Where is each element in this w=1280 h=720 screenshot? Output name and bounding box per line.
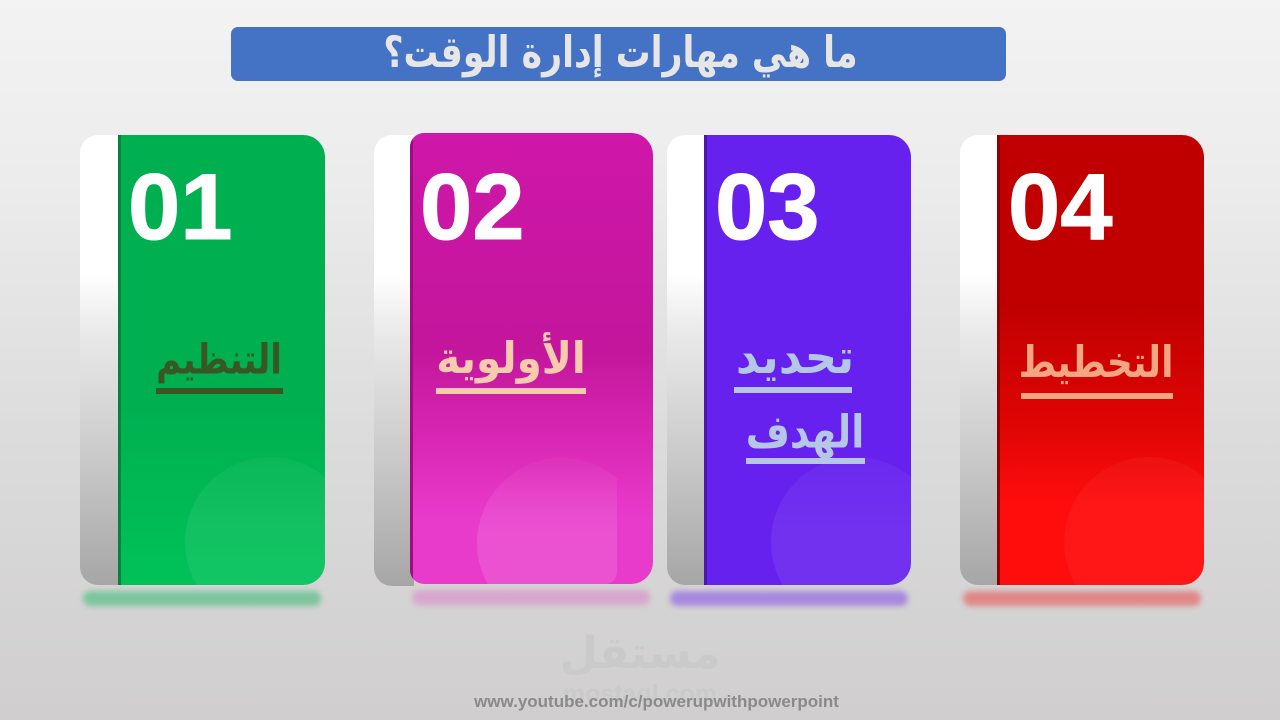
card body [118,135,325,585]
title banner [231,27,1006,81]
watermark: mostaql.com [563,680,717,708]
label: الأولوية [436,332,586,384]
label: التنظيم [156,336,282,384]
number: 02 [420,154,525,259]
label [734,329,865,464]
book spine [960,135,1000,585]
card body [410,133,653,584]
circle clipped [477,466,617,584]
panel: 01 organizing [80,135,325,610]
title text: ما هي مهارات إدارة الوقت؟ [383,28,858,78]
number: 01 [128,154,233,259]
label: التخطيط [1019,339,1173,388]
panel: 02 priority [374,133,653,608]
website URL: www.youtube.com/c/powerupwithpowerpoint [474,692,839,711]
panel: 04 planning [960,135,1204,610]
book spine [374,135,414,586]
card body [997,135,1204,585]
label: تحديد [736,329,854,384]
panel: 03 goal setting [667,135,911,610]
book spine [80,135,120,585]
watermark [560,628,720,708]
number: 03 [715,154,820,259]
reflection [963,591,1201,606]
reflection [412,590,650,605]
book spine [667,135,707,585]
reflection [83,591,321,606]
number: 04 [1008,154,1113,259]
label: الهدف [746,406,864,458]
reflection [670,591,908,606]
card body [704,135,911,585]
watermark: مستقل [560,628,720,679]
